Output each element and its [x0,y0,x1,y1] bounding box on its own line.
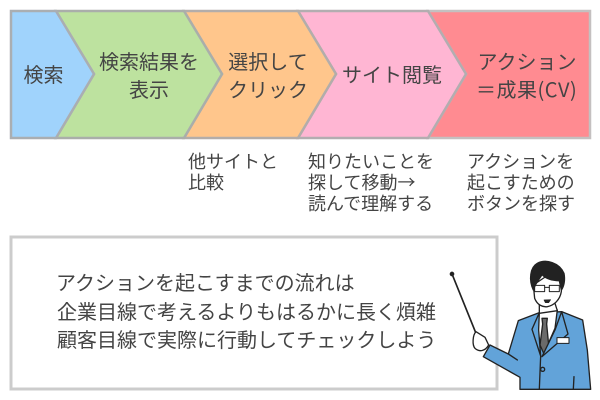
step 5: action [428,11,590,138]
mouth [544,300,551,303]
note: find action button: ボタンを探す [467,194,575,214]
note: find action button: 起こすための [467,173,575,193]
note: compare other sites: 他サイトと [188,152,278,172]
step 3: select and click [184,11,336,138]
panel: summary message: 企業目線で考えるよりもはるかに長く煩雑 [57,301,436,324]
funnel process flow [11,11,590,138]
icon: presenter with pointer [450,261,591,389]
step 1: search [11,11,94,138]
face [533,276,562,307]
step 5: action: ＝成果(CV) [476,74,577,103]
step 5: action: アクション [478,51,576,74]
panel: summary message [11,237,497,389]
step 3: select and click: 選択して [228,51,308,74]
step 4: site browsing: サイト閲覧 [342,64,442,87]
necktie [540,318,549,354]
name badge [557,338,569,343]
lapels [532,312,568,357]
note: read to learn: 読んで理解する [308,194,433,214]
step 2: show search results [56,11,222,138]
panel: summary message: 顧客目線で実際に行動してチェックしよう [57,329,436,352]
note: compare other sites [188,152,278,193]
note: find action button: アクションを [467,152,574,172]
step 2: show search results: 表示 [129,79,169,102]
jacket [483,312,591,389]
step 1: search: 検索 [24,64,64,87]
note: read to learn: 探して移動→ [308,169,415,195]
shirt collar [537,310,557,353]
note: read to learn [308,152,434,214]
step 2: show search results: 検索結果を [99,51,199,74]
pointer stick [450,272,475,332]
note: find action button [467,152,575,214]
jacket button [541,367,545,371]
panel: summary message: アクションを起こすまでの流れは [56,272,355,295]
sleeve and lapel lines [508,354,574,389]
note: read to learn: 知りたいことを [308,152,434,172]
note: compare other sites: 比較 [188,173,224,193]
step 4: site browsing [298,11,466,138]
hair [531,261,565,290]
hand [473,332,489,351]
step 3: select and click: クリック [228,79,308,102]
glasses [535,285,559,292]
neck [539,303,557,313]
